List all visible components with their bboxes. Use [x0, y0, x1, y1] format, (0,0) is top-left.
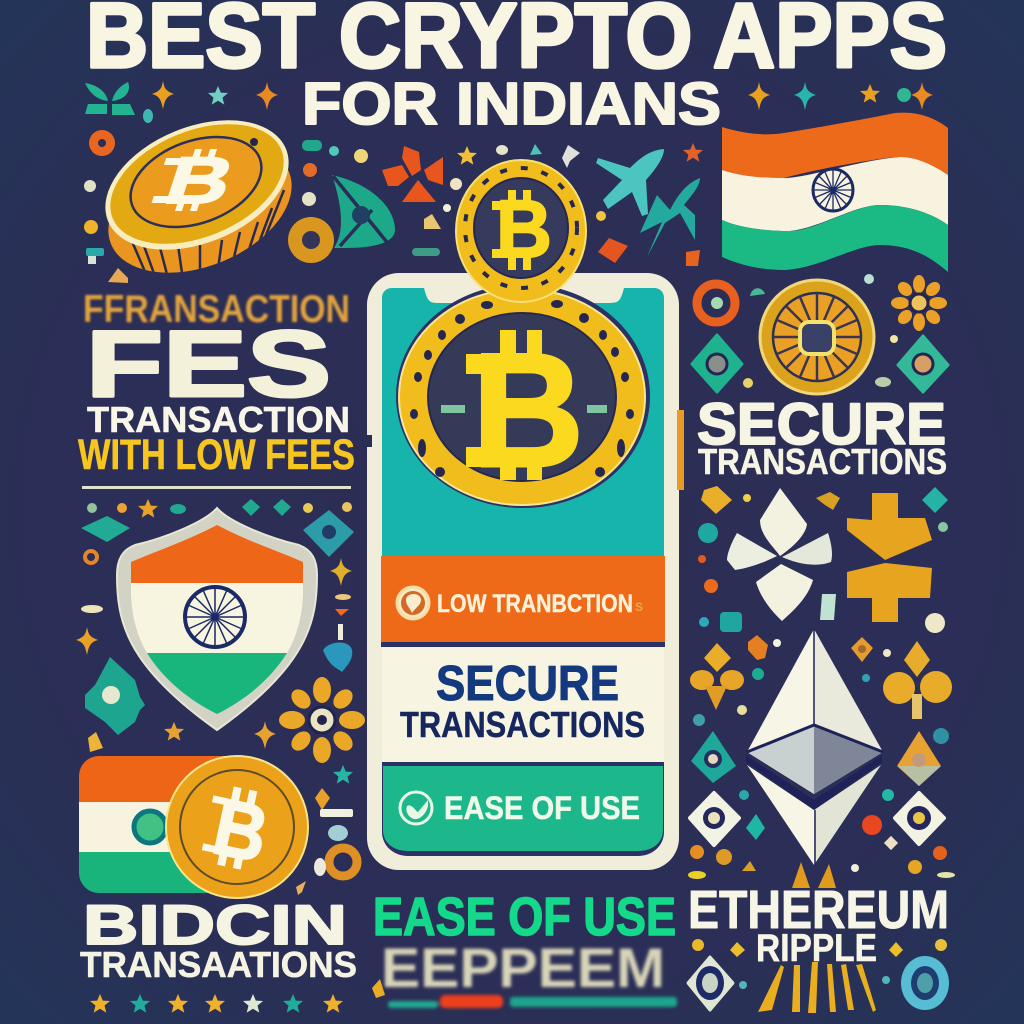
decorative icons: white and gold ornaments: [698, 486, 948, 633]
phone frame: [367, 273, 679, 870]
bitcoin transactions text: BIDCIN: [83, 893, 347, 956]
icon: plane, second: [640, 178, 700, 257]
band: secure transactions: TRANSACTIONS: [400, 704, 645, 745]
band: ease of use: EASE OF USE: [444, 790, 640, 826]
decorative icons: around ethereum: [688, 635, 955, 888]
icon: ashoka chakra: [813, 169, 853, 211]
band: ease of use: [382, 762, 664, 856]
icon: bitcoin symbol: B: [496, 184, 552, 275]
band: secure transactions: SECURE: [436, 657, 619, 711]
blurred caption: EEPPEEM: [381, 936, 665, 999]
title: [86, 0, 947, 137]
ethereum and ripple labels: ETHEREUM: [688, 880, 949, 940]
title: FOR INDIANS: [302, 71, 721, 137]
row of stars: [90, 994, 343, 1013]
shield with Indian flag: [117, 508, 317, 730]
icon: bitcoin symbol: B: [206, 781, 275, 879]
icon: ethereum diamond: [746, 629, 883, 865]
decorative icons: left column middle: [76, 499, 365, 895]
band: low transaction: [381, 556, 665, 647]
left text block: transaction fees: FFRANSACTION: [83, 288, 350, 331]
decorative icons: top row: [84, 81, 933, 283]
ease of use heading: EASE OF USE: [373, 887, 676, 947]
bitcoin transactions text: TRANSAATIONS: [80, 944, 357, 985]
left text block: transaction fees: FES: [86, 311, 331, 416]
coin: gold emblem: [760, 280, 874, 394]
coin: tilted bitcoin, top left: [105, 120, 292, 273]
coin: small bitcoin: [456, 160, 586, 302]
decorative icons: right column upper: [692, 274, 948, 392]
secure transactions text: SECURE: [697, 392, 946, 457]
secure transactions text: [697, 392, 947, 482]
ethereum and ripple labels: RIPPLE: [756, 927, 877, 970]
phone mockup: [362, 160, 684, 870]
secure transactions text: TRANSACTIONS: [698, 441, 947, 482]
coin: large bitcoin: [396, 284, 650, 508]
flag: India, waving: [722, 113, 948, 272]
band: low transaction: S: [635, 600, 643, 614]
ethereum and ripple labels: [688, 880, 949, 970]
left text block: transaction fees: TRANSACTION: [87, 399, 350, 440]
left text block: transaction fees: WITH LOW FEES: [78, 431, 355, 479]
icon: plane: [596, 149, 664, 216]
icon: bitcoin symbol: B: [157, 145, 243, 218]
icon: ashoka chakra: [185, 587, 245, 647]
flag and coin: bottom left: [79, 756, 308, 898]
decorative icons: bottom right: [372, 939, 949, 1013]
band: low transaction: LOW TRANBCTION: [437, 590, 633, 618]
icon: bitcoin symbol: B: [472, 320, 584, 501]
bitcoin transactions text: [80, 893, 357, 985]
left text block: transaction fees: [78, 288, 355, 489]
band: secure transactions: [382, 647, 664, 762]
phone screen: [382, 288, 664, 558]
